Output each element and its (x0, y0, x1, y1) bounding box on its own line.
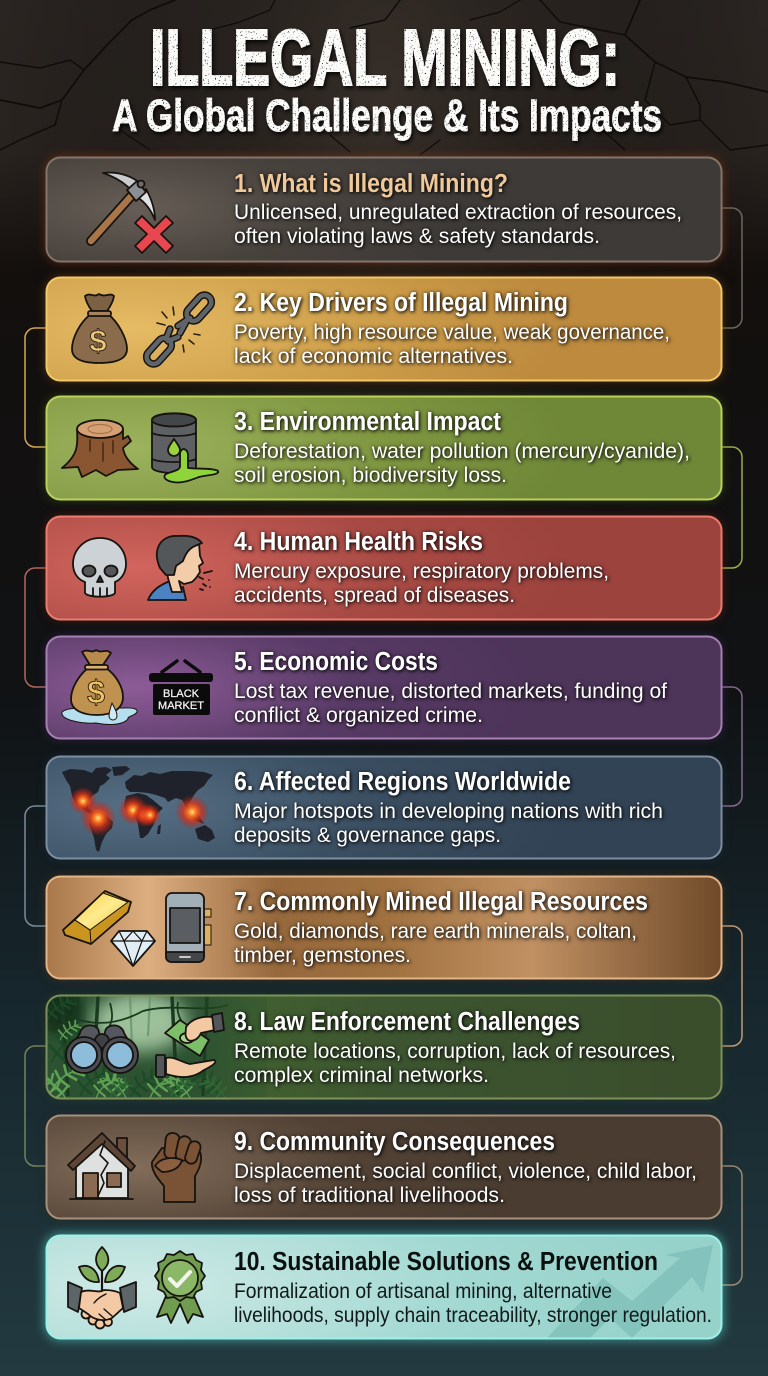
icon: black market sign: MARKET (158, 700, 204, 712)
icon: diamond (111, 931, 155, 966)
heading and text: conflict & organized crime. (234, 704, 483, 727)
icon: smartphone with chips (166, 893, 211, 962)
heading and text: Displacement, social conflict, violence, child labor, (234, 1160, 697, 1183)
heading and text: Deforestation, water pollution (mercury/cyanide), (234, 440, 690, 463)
heading and text: 6. Affected Regions Worldwide (234, 768, 571, 796)
panel 2: key drivers (46, 277, 722, 381)
heading and text: complex criminal networks. (234, 1064, 489, 1087)
panel 1: what is illegal mining (46, 157, 722, 262)
panel 8: law enforcement challenges (35, 986, 722, 1100)
icon: money bag: $ (89, 323, 107, 358)
icon: raised fist (152, 1132, 202, 1202)
heading and text: timber, gemstones. (234, 944, 411, 967)
panel 10: sustainable solutions (44, 1233, 724, 1341)
heading and text: 3. Environmental Impact (234, 408, 501, 436)
icon: money bag (72, 294, 127, 363)
icon: leaking money bag on puddle: $ (87, 674, 105, 710)
icon: award rosette with check (155, 1251, 205, 1323)
icon: pickaxe with red cross (91, 173, 173, 253)
heading and text (234, 528, 609, 607)
heading and text: Poverty, high resource value, weak governance, (234, 321, 670, 344)
heading and text: 9. Community Consequences (234, 1128, 555, 1156)
heading and text: soil erosion, biodiversity loss. (234, 464, 507, 487)
heading and text: 4. Human Health Risks (234, 528, 483, 556)
icon: tree stump (62, 420, 138, 477)
heading and text (234, 1128, 697, 1207)
panel 3: environmental impact (46, 396, 722, 500)
panel 6: affected regions (46, 756, 722, 859)
heading and text: 10. Sustainable Solutions & Prevention (234, 1248, 658, 1276)
panel 5: economic costs (46, 636, 722, 739)
icon: black market sign (149, 661, 213, 715)
heading and text (234, 289, 670, 368)
heading and text: Lost tax revenue, distorted markets, funding of (234, 680, 667, 703)
icon: leaking money bag on puddle (62, 650, 137, 724)
title (112, 13, 662, 141)
heading and text (234, 1008, 676, 1087)
heading and text: deposits & governance gaps. (234, 824, 501, 847)
icon: coughing person (148, 536, 212, 600)
heading and text: 2. Key Drivers of Illegal Mining (234, 289, 568, 317)
heading and text: Mercury exposure, respiratory problems, (234, 560, 609, 583)
panel 7: commonly mined resources (46, 876, 722, 979)
heading and text: 1. What is Illegal Mining? (234, 170, 508, 198)
heading and text (234, 768, 663, 847)
icon: gold bar (63, 891, 131, 944)
connector lines between panels (25, 208, 742, 1285)
icon: black market sign: BLACK (163, 688, 200, 700)
panel 9: community consequences (46, 1115, 722, 1219)
heading and text: accidents, spread of diseases. (234, 584, 515, 607)
background growth arrows (547, 1245, 713, 1338)
icon: broken chain (144, 292, 214, 367)
heading and text (234, 648, 667, 727)
heading and text (234, 408, 690, 487)
heading and text: 7. Commonly Mined Illegal Resources (234, 888, 648, 916)
heading and text (234, 888, 648, 967)
heading and text: 8. Law Enforcement Challenges (234, 1008, 580, 1036)
icon: skull (73, 538, 126, 597)
heading and text: Formalization of artisanal mining, alternative (234, 1280, 612, 1303)
icon: cracked house (68, 1133, 135, 1199)
heading and text: 5. Economic Costs (234, 648, 438, 676)
icon: handshake with plant (68, 1247, 136, 1328)
icon: oil barrel with green spill (152, 413, 218, 483)
heading and text: lack of economic alternatives. (234, 345, 513, 368)
heading and text: Unlicensed, unregulated extraction of resources, (234, 201, 682, 224)
heading and text: often violating laws & safety standards. (234, 225, 600, 248)
heading and text (234, 1248, 712, 1327)
heading and text: Major hotspots in developing nations with rich (234, 800, 663, 823)
heading and text: Gold, diamonds, rare earth minerals, coltan, (234, 920, 637, 943)
heading and text: Remote locations, corruption, lack of resources, (234, 1040, 676, 1063)
heading and text: livelihoods, supply chain traceability, stronger regulation. (234, 1304, 712, 1327)
jungle backdrop (48, 996, 252, 1098)
icon: bribe money between hands (156, 1013, 224, 1077)
icon: world map with hotspots (62, 766, 215, 852)
icon: binoculars (66, 1025, 138, 1073)
panel 4: human health risks (46, 516, 722, 620)
heading and text: loss of traditional livelihoods. (234, 1184, 505, 1207)
heading and text (234, 170, 682, 248)
